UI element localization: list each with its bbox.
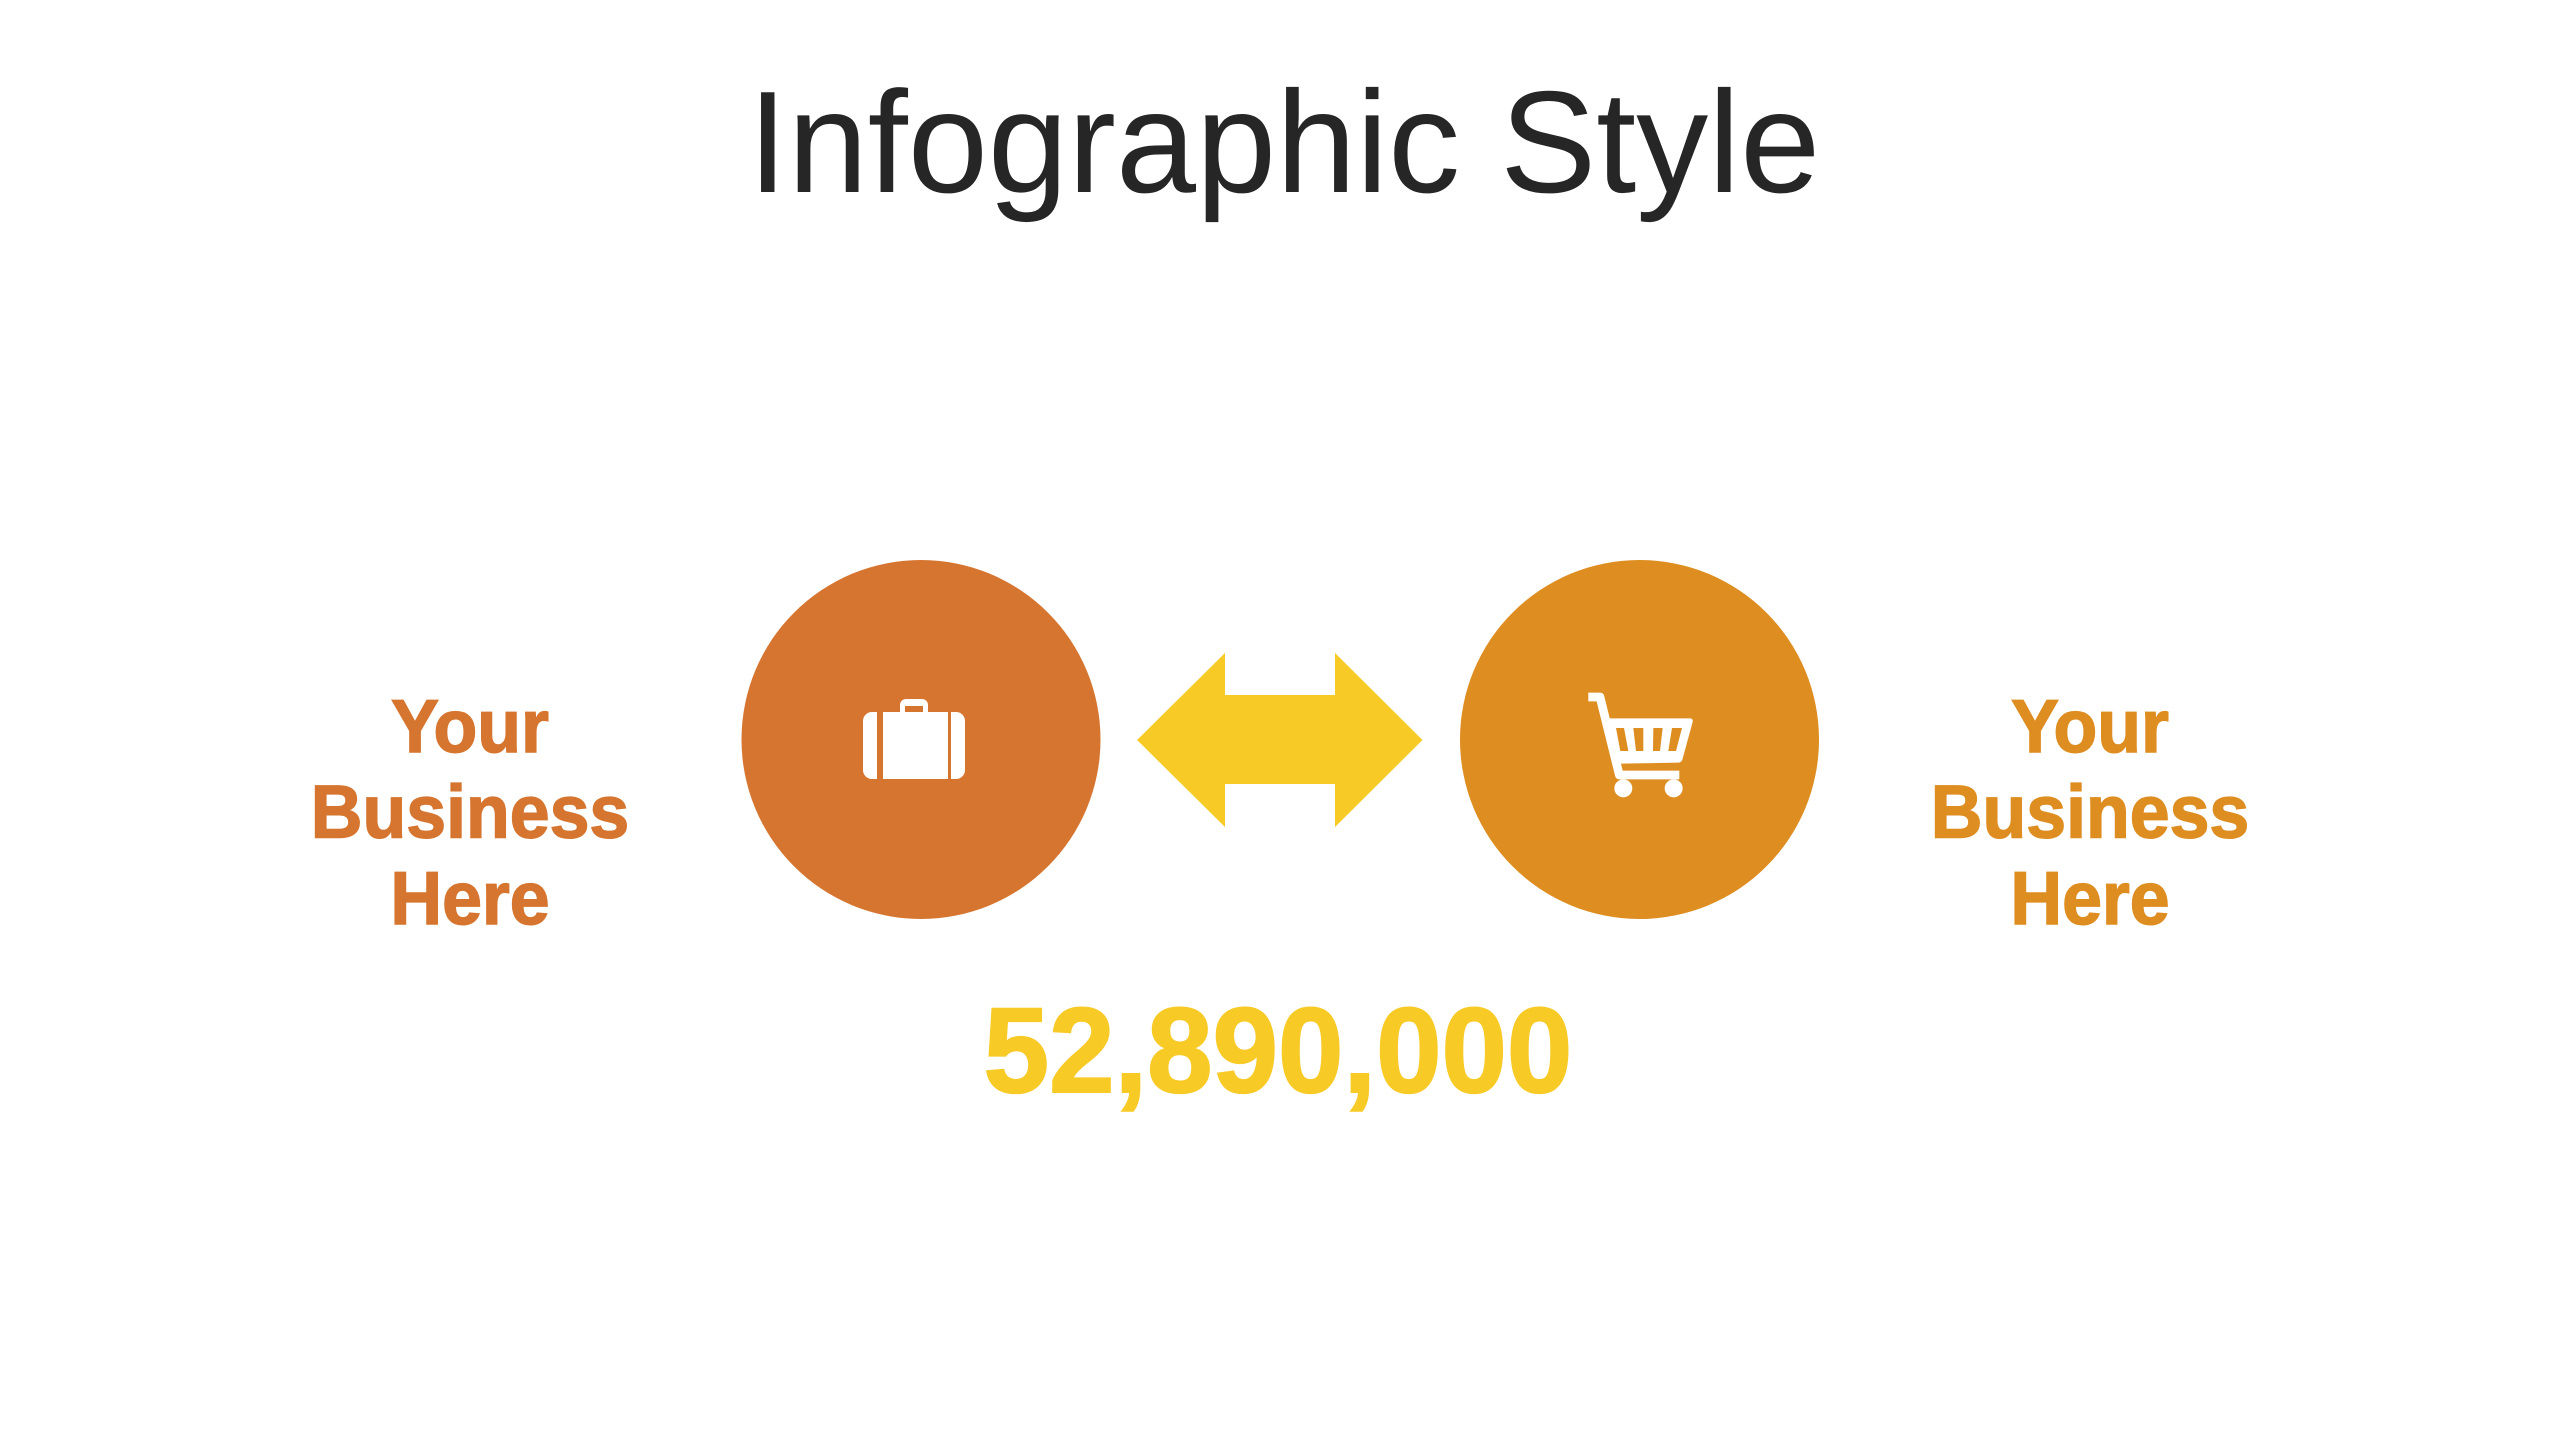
right label: Your Business Here: Here (2010, 856, 2170, 940)
left label: Your Business Here: Your (391, 684, 549, 768)
left label: Your Business Here: Business (311, 770, 629, 854)
left circle with briefcase icon (742, 560, 1100, 919)
big number: 52,890,000 (984, 982, 1572, 1118)
icon: shopping cart (1588, 697, 1693, 797)
left label: Your Business Here: Here (390, 856, 550, 940)
right label: Your Business Here (1931, 684, 2249, 940)
right circle with shopping cart icon (1460, 560, 1819, 919)
right label: Your Business Here: Your (2011, 684, 2169, 768)
right label: Your Business Here: Business (1931, 770, 2249, 854)
left label: Your Business Here (311, 684, 629, 940)
icon: briefcase (863, 699, 965, 779)
double-headed arrow (1137, 653, 1422, 827)
title: Infographic Style (748, 61, 1820, 223)
